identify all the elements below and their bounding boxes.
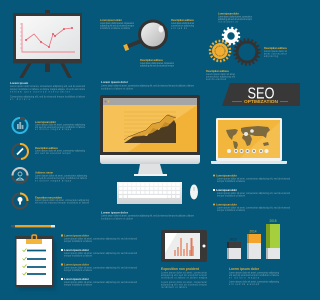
text block: ring 2: Lorem ipsum dolor sit amet, consectetur adipiscing	[35, 150, 86, 152]
text block: clipboard list 2: Lorem ipsum dolor sit amet, consectetur adipiscing elit, sed do eiusmod	[64, 252, 138, 255]
text block: easel caption	[10, 81, 86, 101]
text block: tablet caption: adipiscing elit sed do eiusmod tempor	[161, 274, 207, 277]
text block: gears bottom	[206, 69, 235, 81]
text block: gears top: incididunt ut	[218, 20, 238, 24]
bar 2013: 2013	[229, 238, 237, 242]
text block: laptop list 2	[213, 188, 291, 198]
text block: magnifier right: Description address	[171, 18, 194, 22]
clip	[32, 235, 36, 239]
text block: laptop list 1: tempor incididunt ut labore	[217, 180, 246, 183]
text block: below keyboard	[101, 210, 195, 220]
tablet	[161, 230, 207, 262]
text block: ring 3: elit sed do eiusmod tempor incididunt ut labore	[35, 177, 88, 180]
text block: bar chart caption: Lorem ipsum dolor	[229, 267, 260, 271]
keyboard	[117, 182, 182, 204]
text block: magnifier below: Lorem ipsum dolor sit amet, consectetur	[140, 62, 174, 65]
3D bar chart	[227, 219, 280, 259]
text block: clipboard list 3: Lorem ipsum dolor sit amet, consectetur adipiscing elit, sed do eiusmod	[64, 266, 138, 270]
text block: tablet caption	[161, 267, 208, 289]
text block: laptop list 2: Lorem ipsum dolor sit amet, consectetur adipiscing elit, sed do eiusmod	[217, 192, 291, 195]
text block: laptop list 1	[213, 174, 291, 183]
pencil strip	[11, 225, 55, 227]
bar chart on tablet	[174, 238, 194, 256]
dark gear	[234, 40, 260, 64]
bar 2015: 2015	[269, 219, 277, 223]
icon ring: pencil	[12, 144, 28, 159]
text block: laptop list 3: Lorem ipsum dolor	[216, 202, 238, 206]
text block: bar chart caption: Lorem ipsum dolor sit amet, consectetur adipiscing	[229, 272, 280, 274]
text block: clipboard list 1: Lorem ipsum dolor	[64, 234, 90, 238]
text block: bar chart caption: et dolore magna	[229, 276, 260, 280]
text block: gears bottom: Lorem ipsum dolor sit amet	[206, 73, 235, 76]
text block: clipboard list 1: Lorem ipsum dolor sit amet, consectetur adipiscing elit, sed do eiusmod	[64, 238, 138, 240]
text block: ring 1: et dolore magna aliqua	[35, 128, 72, 131]
text block: bar chart caption	[229, 267, 280, 286]
text block: top left	[100, 18, 134, 30]
text block: tablet caption: Lorem ipsum dolor sit amet, consectetur	[161, 272, 207, 274]
text block: below keyboard: Lorem ipsum dolor sit amet, consectetur adipiscing elit, sed do eiusmod tempor incididunt ut labore	[101, 214, 195, 218]
text block: bar chart caption: elit sed do eiusmod	[229, 283, 260, 286]
text block: gears top	[218, 12, 252, 24]
text block: gears bottom: sed do eiusmod	[206, 79, 227, 81]
text block: clipboard list 3	[61, 262, 138, 272]
text block: clipboard list 4: tempor incididunt ut labore	[64, 284, 93, 286]
text block: ring 1: Lorem ipsum dolor	[35, 120, 57, 124]
icon ring: light bulb	[12, 194, 28, 208]
text block: tablet caption: incididunt ut labore et dolore magna	[161, 276, 208, 280]
text block: ring 4: elit sed do eiusmod tempor incididunt ut labore	[35, 202, 90, 204]
checklist	[22, 248, 46, 275]
white gear	[223, 28, 239, 44]
text block: clipboard list 4: Lorem ipsum dolor sit amet, consectetur adipiscing elit, sed do eiusmod	[64, 281, 138, 284]
text block: ring 4: Lorem ipsum dolor sit amet, consectetur adipiscing	[35, 199, 90, 202]
text block: clipboard list 3: Lorem ipsum dolor	[64, 262, 90, 266]
text block: top left: Lorem ipsum dolor	[100, 18, 123, 22]
pin row	[227, 149, 268, 153]
clipboard	[15, 235, 56, 290]
SEO banner	[222, 83, 300, 106]
text block: clipboard list 3: tempor incididunt ut labore	[64, 269, 93, 272]
text block: easel caption: Lorem ipsum dolor sit amet, consectetur adipiscing elit, sed do eiusmod	[10, 85, 86, 88]
text block: ring 2	[35, 146, 86, 155]
text block: ring 2: elit sed do eiusmod tempor	[35, 152, 71, 155]
text block: gears right: amet consectetur	[264, 52, 287, 56]
text block: ring 3: Lorem ipsum dolor sit amet, consectetur adipiscing	[35, 174, 88, 178]
screen	[103, 98, 197, 152]
SEO banner: OPTIMIZATION	[244, 99, 278, 104]
text block: laptop list 1: Lorem ipsum dolor	[216, 174, 238, 178]
text block: gears top: Lorem ipsum dolor	[218, 12, 240, 16]
laptop	[211, 118, 287, 164]
text block: laptop list 2: Lorem ipsum dolor	[216, 188, 238, 192]
text block: ring 3: Address name	[35, 170, 53, 174]
SEO banner: SEO	[248, 86, 274, 102]
text block: laptop list 3	[213, 202, 291, 212]
text block: easel caption: et dolore	[10, 98, 31, 101]
bar 2014: 2014	[249, 230, 257, 234]
yellow gear	[210, 41, 230, 61]
monitor frame	[100, 95, 200, 155]
desktop monitor	[100, 95, 200, 176]
text block: gears top: Lorem ipsum dolor sit amet, consectetur	[218, 16, 252, 18]
text block: ring 3	[35, 170, 88, 182]
line chart on board	[20, 23, 75, 52]
text block: ring 4	[35, 196, 90, 204]
text block: clipboard list 1	[61, 234, 138, 243]
world map	[226, 126, 270, 150]
text block: tablet caption: Exposition non proident	[161, 267, 200, 271]
text block: ring 4: Exposition non proident	[35, 196, 62, 200]
mouse	[190, 184, 198, 200]
text block: magnifier right: elit sed do	[171, 27, 188, 30]
text block: easel caption: Lorem ipsum	[10, 81, 29, 85]
text block: ring 2: Description address	[35, 146, 58, 150]
text block: magnifier right: Lorem ipsum dolor sit amet	[171, 22, 194, 25]
text block: ring 3: et dolore magna aliqua	[35, 180, 72, 182]
text block: laptop list 2: tempor incididunt ut labore	[217, 194, 246, 198]
text block: tablet caption: Lorem ipsum dolor sit amet, consectetur	[161, 281, 207, 284]
icon ring: person	[12, 168, 28, 183]
text block: gears right	[264, 46, 287, 58]
text block: above monitor	[101, 80, 195, 90]
text block: tablet caption: incididunt ut labore	[161, 286, 188, 289]
text block: above monitor: Lorem ipsum dolor sit amet, consectetur adipiscing elit, sed do eiusmod tempor incididunt ut labore	[101, 84, 195, 88]
text block: below keyboard: incididunt ut labore et dolore	[101, 218, 134, 220]
text block: ring 1: elit sed do eiusmod tempor incididunt ut labore	[35, 126, 86, 129]
text block: gears top: adipiscing elit sed do eiusmod tempor	[218, 18, 252, 21]
text block: ring 1: Lorem ipsum dolor sit amet, consectetur adipiscing	[35, 124, 86, 126]
text block: gears bottom: consectetur adipiscing elit	[206, 76, 235, 78]
text block: easel caption: tempor incididunt ut labore et dolore magna aliqua. Ut enim ad minim	[10, 88, 85, 91]
area chart on screen	[124, 112, 176, 143]
text block: clipboard list 4: Lorem ipsum dolor	[64, 277, 90, 281]
text block: ring 1	[35, 120, 86, 131]
text block: clipboard list 2	[61, 248, 138, 258]
text block: top left: Lorem ipsum dolor sit amet, consectetur	[100, 22, 134, 25]
text block: laptop list 3: Lorem ipsum dolor sit amet, consectetur adipiscing elit, sed do eiusmod	[217, 206, 291, 210]
text block: magnifier below: adipiscing elit sed do eiusmod tempor	[140, 64, 174, 68]
text block: magnifier below	[140, 58, 174, 68]
text block: gears right: adipiscing	[264, 56, 279, 58]
text block: bar chart caption: elit sed do eiusmod tempor incididunt ut labore	[229, 274, 280, 277]
text block: magnifier right: consectetur adipiscing	[171, 24, 195, 28]
text block: magnifier right	[171, 18, 195, 30]
text block: bar chart caption: Lorem ipsum dolor sit amet, consectetur adipiscing	[229, 280, 280, 284]
text block: tablet caption: adipiscing elit sed do eiusmod tempor	[161, 284, 207, 286]
text block: magnifier below: Description address	[140, 58, 163, 62]
monitor stand	[138, 164, 163, 174]
icon ring: chart	[12, 118, 28, 133]
text block: gears right: Lorem ipsum dolor sit	[264, 50, 287, 53]
text block: laptop list 1: Lorem ipsum dolor sit amet, consectetur adipiscing elit, sed do eiusmod	[217, 178, 291, 180]
text block: gears right: Description address	[264, 46, 287, 50]
text block: below keyboard: Lorem ipsum dolor	[101, 210, 129, 214]
icon: magnifying glass	[123, 20, 168, 51]
text block: above monitor: Lorem ipsum dolor	[101, 80, 129, 84]
text block: above monitor: incididunt ut labore et dolore	[101, 88, 134, 90]
text block: laptop list 3: tempor incididunt ut labore	[217, 209, 246, 212]
text block: top left: incididunt ut labore et dolore	[100, 27, 131, 30]
text block: gears bottom: Description address	[206, 69, 229, 73]
text block: top left: adipiscing elit sed do eiusmod tempor	[100, 24, 134, 28]
text block: clipboard list 4	[61, 277, 138, 286]
text block: easel caption: Consectetur adipiscing elit, sed do eiusmod tempor incididunt ut labore	[10, 96, 86, 98]
icon: gears	[210, 28, 260, 64]
text block: clipboard list 1: tempor incididunt ut labore	[64, 240, 93, 243]
map pins	[244, 129, 254, 136]
easel presentation board	[13, 10, 82, 78]
text block: easel caption: veniam quis nostrud exercitation	[10, 90, 71, 94]
text block: clipboard list 2: Lorem ipsum dolor	[64, 248, 90, 252]
text block: clipboard list 2: tempor incididunt ut labore	[64, 254, 93, 258]
